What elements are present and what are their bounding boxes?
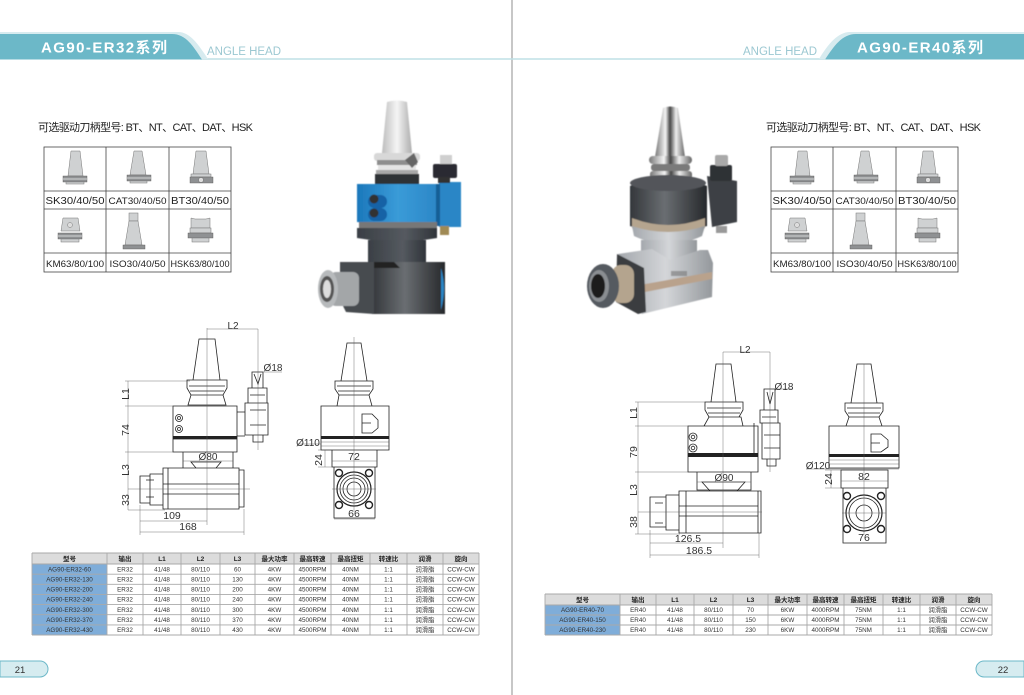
table header: L1 bbox=[158, 556, 166, 563]
center page divider bbox=[511, 0, 513, 695]
table rows: 41/48 bbox=[154, 607, 170, 614]
table rows: 4500RPM bbox=[298, 627, 327, 634]
table header: 型号 bbox=[63, 554, 76, 563]
shank labels: ISO30/40/50 bbox=[836, 259, 892, 270]
dimension labels: 24 bbox=[823, 473, 835, 485]
dimension labels: 82 bbox=[858, 471, 870, 483]
table header: 输出 bbox=[632, 595, 644, 604]
table rows: 370 bbox=[232, 617, 243, 624]
table rows: 130 bbox=[232, 576, 243, 584]
table rows: 80/110 bbox=[191, 586, 210, 594]
table rows: ER32 bbox=[117, 607, 133, 614]
table rows: CCW-CW bbox=[447, 576, 475, 584]
table rows: ER32 bbox=[117, 617, 133, 624]
right header title: AG90-ER40系列 bbox=[857, 38, 983, 56]
page number tab 21: 21 bbox=[15, 665, 25, 676]
dimension labels bbox=[296, 438, 360, 520]
table header: L3 bbox=[234, 556, 242, 563]
icon: KM shank bbox=[785, 218, 809, 242]
table rows: 润滑脂 bbox=[929, 625, 948, 634]
dimension labels: L3 bbox=[120, 464, 132, 476]
left header subtitle: ANGLE HEAD bbox=[207, 46, 281, 58]
page number tab 22 bbox=[976, 661, 1024, 677]
table rows: 润滑脂 bbox=[416, 625, 435, 634]
table rows: 1:1 bbox=[384, 586, 393, 594]
table rows: ER32 bbox=[117, 586, 133, 594]
table rows: 80/110 bbox=[704, 617, 723, 624]
table rows: 4KW bbox=[268, 576, 281, 584]
table rows: 4KW bbox=[268, 597, 281, 604]
dimension labels: Ø90 bbox=[715, 473, 734, 484]
table rows: 1:1 bbox=[384, 597, 393, 604]
icon: BT shank bbox=[190, 151, 213, 183]
table rows: 润滑脂 bbox=[416, 584, 435, 594]
table header: 润滑 bbox=[932, 595, 945, 604]
table rows: 150 bbox=[745, 617, 756, 624]
table header: 最大功率 bbox=[262, 554, 288, 563]
table rows: 75NM bbox=[855, 627, 872, 634]
table header: L2 bbox=[197, 556, 205, 563]
table rows: 70 bbox=[747, 607, 754, 614]
table header: 转速比 bbox=[379, 554, 399, 563]
table rows: ER32 bbox=[117, 566, 133, 574]
table rows: AG90-ER32-240 bbox=[46, 597, 93, 604]
table rows: ER40 bbox=[630, 607, 646, 614]
table rows: 80/110 bbox=[191, 576, 210, 584]
table rows: 75NM bbox=[855, 617, 872, 624]
shank labels bbox=[46, 195, 230, 270]
table header: L1 bbox=[671, 597, 679, 604]
shank labels: BT30/40/50 bbox=[898, 195, 956, 207]
table rows: 1:1 bbox=[897, 627, 906, 634]
table rows: 1:1 bbox=[897, 617, 906, 624]
table rows: 4000RPM bbox=[811, 607, 840, 614]
table rows: ER40 bbox=[630, 627, 646, 634]
table rows: 40NM bbox=[342, 607, 359, 614]
dimension labels: Ø18 bbox=[775, 382, 794, 393]
left shank table bbox=[44, 147, 231, 272]
icon: ISO shank bbox=[123, 213, 145, 249]
dimension labels: 24 bbox=[313, 454, 325, 466]
table rows: AG90-ER32-130 bbox=[46, 576, 93, 584]
dimension labels: 186.5 bbox=[686, 545, 712, 557]
table rows: AG90-ER32-430 bbox=[46, 627, 93, 634]
dimension labels: 74 bbox=[120, 424, 132, 436]
table rows: AG90-ER32-60 bbox=[48, 566, 92, 574]
table header bbox=[576, 595, 980, 604]
table rows: CCW-CW bbox=[447, 566, 475, 574]
table rows: ER32 bbox=[117, 627, 133, 634]
table rows: 4500RPM bbox=[298, 617, 327, 624]
table rows: 430 bbox=[232, 627, 243, 634]
dimension labels: 33 bbox=[120, 494, 132, 506]
dimension labels: L3 bbox=[628, 484, 640, 496]
table rows: 1:1 bbox=[384, 607, 393, 614]
table rows: 41/48 bbox=[154, 586, 170, 594]
table: ER32 specifications bbox=[32, 553, 479, 635]
table rows: 润滑脂 bbox=[416, 615, 435, 624]
icon: HSK shank bbox=[188, 218, 213, 242]
dimension labels: Ø18 bbox=[264, 363, 283, 374]
table rows: 4000RPM bbox=[811, 627, 840, 634]
left header band bbox=[0, 32, 512, 60]
table header bbox=[63, 554, 468, 563]
table rows: 41/48 bbox=[667, 607, 683, 614]
table rows: 41/48 bbox=[154, 566, 170, 574]
table rows: 4KW bbox=[268, 607, 281, 614]
dimension labels: L1 bbox=[628, 407, 640, 419]
table rows: CCW-CW bbox=[447, 597, 475, 604]
shank labels: SK30/40/50 bbox=[772, 195, 832, 207]
table header: 型号 bbox=[576, 595, 590, 604]
dimension labels: 79 bbox=[628, 446, 640, 458]
left shank options heading: 可选驱动刀柄型号: BT、NT、CAT、DAT、HSK bbox=[38, 120, 254, 134]
page number tab 21 bbox=[0, 661, 48, 677]
table rows: 80/110 bbox=[191, 607, 210, 614]
table rows: 4KW bbox=[268, 617, 281, 624]
dimension labels bbox=[628, 345, 794, 557]
table rows: 4500RPM bbox=[298, 607, 327, 614]
table rows: 40NM bbox=[342, 576, 359, 584]
dimension labels: 126.5 bbox=[675, 533, 701, 545]
table rows: 1:1 bbox=[384, 617, 393, 624]
table rows: 40NM bbox=[342, 627, 359, 634]
icon: KM shank bbox=[58, 218, 82, 242]
table rows: 4500RPM bbox=[298, 576, 327, 584]
left header title: AG90-ER32系列 bbox=[41, 38, 167, 56]
page number tab 22: 22 bbox=[998, 665, 1008, 676]
table rows: 41/48 bbox=[154, 576, 170, 584]
table rows: 4500RPM bbox=[298, 597, 327, 604]
dimension labels: L2 bbox=[227, 321, 239, 332]
table header: 旋向 bbox=[968, 595, 980, 604]
shank labels: HSK63/80/100 bbox=[170, 259, 230, 269]
icon: BT shank bbox=[917, 151, 940, 183]
table rows: 6KW bbox=[781, 627, 794, 634]
right shank options heading: 可选驱动刀柄型号: BT、NT、CAT、DAT、HSK bbox=[766, 120, 982, 134]
table header: 最高转速 bbox=[300, 554, 326, 563]
table rows: 润滑脂 bbox=[416, 564, 435, 574]
table rows: 4KW bbox=[268, 586, 281, 594]
dimension labels: 38 bbox=[628, 516, 640, 528]
table rows: 80/110 bbox=[191, 566, 210, 574]
table rows: 40NM bbox=[342, 617, 359, 624]
dimension lines bbox=[125, 328, 282, 535]
table header: 转速比 bbox=[892, 595, 912, 604]
table header: 润滑 bbox=[418, 554, 432, 563]
table header: 最高转速 bbox=[812, 595, 839, 604]
table rows: 40NM bbox=[342, 586, 359, 594]
table header: 旋向 bbox=[454, 554, 468, 563]
table rows: 80/110 bbox=[191, 617, 210, 624]
dimension lines bbox=[635, 352, 792, 558]
table rows: AG90-ER40-230 bbox=[559, 627, 606, 634]
right shank table bbox=[771, 147, 958, 272]
table rows: AG90-ER32-300 bbox=[46, 607, 93, 614]
table rows: 1:1 bbox=[384, 566, 393, 574]
technical drawing: ER32 front view bbox=[296, 337, 389, 520]
dimension lines bbox=[807, 364, 899, 543]
table header: L3 bbox=[747, 597, 755, 604]
dimension labels: L1 bbox=[120, 388, 132, 400]
table rows: 润滑脂 bbox=[929, 615, 948, 624]
icon: HSK shank bbox=[915, 218, 940, 242]
dimension labels: 168 bbox=[179, 521, 197, 533]
table rows: 润滑脂 bbox=[416, 595, 435, 604]
dimension labels: 66 bbox=[348, 508, 360, 520]
right header subtitle: ANGLE HEAD bbox=[743, 46, 817, 58]
dimension labels bbox=[806, 461, 870, 544]
icon: CAT shank bbox=[854, 151, 878, 183]
table rows: AG90-ER32-370 bbox=[46, 617, 93, 624]
table rows: 80/110 bbox=[191, 627, 210, 634]
shank labels bbox=[772, 195, 956, 270]
table rows: 1:1 bbox=[384, 576, 393, 584]
technical drawing: ER40 side view bbox=[628, 345, 794, 558]
table rows: 4000RPM bbox=[811, 617, 840, 624]
table rows: CCW-CW bbox=[960, 617, 988, 624]
table rows: 4500RPM bbox=[298, 586, 327, 594]
shank labels: KM63/80/100 bbox=[46, 259, 104, 270]
table rows bbox=[46, 564, 475, 634]
dimension labels: Ø120 bbox=[806, 461, 831, 472]
dimension labels: Ø80 bbox=[199, 452, 218, 463]
table rows: 6KW bbox=[781, 617, 794, 624]
table rows: CCW-CW bbox=[447, 607, 475, 614]
shank labels: CAT30/40/50 bbox=[108, 196, 166, 207]
table rows: 4KW bbox=[268, 566, 281, 574]
icon: SK shank bbox=[790, 151, 814, 184]
table rows: AG90-ER40-70 bbox=[561, 607, 605, 614]
table rows: AG90-ER32-200 bbox=[46, 586, 93, 594]
table rows: ER32 bbox=[117, 576, 133, 584]
table rows: 4KW bbox=[268, 627, 281, 634]
table rows: CCW-CW bbox=[447, 586, 475, 594]
table rows: 润滑脂 bbox=[416, 574, 435, 584]
right header band bbox=[512, 32, 1024, 60]
table rows: 6KW bbox=[781, 607, 794, 614]
technical drawing: ER32 side view bbox=[120, 321, 283, 535]
product photo: ER32 blue angle head bbox=[318, 100, 461, 314]
icon: SK shank bbox=[63, 151, 87, 184]
shank labels: HSK63/80/100 bbox=[898, 259, 956, 269]
table rows bbox=[559, 605, 988, 634]
shank labels: CAT30/40/50 bbox=[836, 196, 894, 207]
table header: 最大功率 bbox=[774, 595, 801, 604]
table rows: 润滑脂 bbox=[416, 605, 435, 614]
dimension labels: 76 bbox=[858, 532, 870, 544]
table rows: 1:1 bbox=[897, 607, 906, 614]
table rows: 200 bbox=[232, 586, 243, 594]
table rows: CCW-CW bbox=[447, 617, 475, 624]
table header: 最高扭矩 bbox=[338, 554, 364, 563]
table rows: CCW-CW bbox=[960, 607, 988, 614]
table rows: 41/48 bbox=[667, 627, 683, 634]
icon: ISO shank bbox=[850, 213, 872, 249]
table rows: ER40 bbox=[630, 617, 646, 624]
table: ER40 specifications bbox=[545, 594, 992, 635]
table rows: 80/110 bbox=[704, 607, 723, 614]
table header: 最高扭矩 bbox=[850, 595, 877, 604]
shank labels: ISO30/40/50 bbox=[110, 259, 166, 270]
icon: CAT shank bbox=[127, 151, 151, 183]
table rows: 300 bbox=[232, 607, 243, 614]
table rows: 240 bbox=[232, 597, 243, 604]
table rows: 41/48 bbox=[154, 617, 170, 624]
dimension labels bbox=[120, 321, 283, 533]
table header: 输出 bbox=[118, 554, 132, 563]
shank labels: BT30/40/50 bbox=[171, 195, 229, 207]
table rows: 润滑脂 bbox=[929, 605, 948, 614]
table rows: 41/48 bbox=[154, 627, 170, 634]
dimension labels: 72 bbox=[348, 451, 360, 463]
technical drawing: ER40 front view bbox=[806, 364, 899, 544]
table rows: 75NM bbox=[855, 607, 872, 614]
table rows: AG90-ER40-150 bbox=[559, 617, 606, 624]
table rows: 60 bbox=[234, 566, 241, 574]
shank labels: KM63/80/100 bbox=[773, 259, 831, 270]
shank labels: SK30/40/50 bbox=[46, 195, 105, 207]
table rows: 40NM bbox=[342, 597, 359, 604]
table rows: 41/48 bbox=[667, 617, 683, 624]
table rows: 80/110 bbox=[704, 627, 723, 634]
table rows: ER32 bbox=[117, 597, 133, 604]
dimension labels: Ø110 bbox=[296, 438, 320, 449]
table header: L2 bbox=[710, 597, 718, 604]
table rows: CCW-CW bbox=[447, 627, 475, 634]
table rows: 80/110 bbox=[191, 597, 210, 604]
dimension labels: 109 bbox=[163, 510, 181, 522]
table rows: CCW-CW bbox=[960, 627, 988, 634]
table rows: 4500RPM bbox=[298, 566, 327, 574]
table rows: 1:1 bbox=[384, 627, 393, 634]
table rows: 41/48 bbox=[154, 597, 170, 604]
dimension lines bbox=[298, 337, 377, 519]
table rows: 40NM bbox=[342, 566, 359, 574]
product photo: ER40 dark silver angle head bbox=[587, 106, 737, 314]
dimension labels: L2 bbox=[739, 345, 751, 356]
table rows: 230 bbox=[745, 627, 756, 634]
